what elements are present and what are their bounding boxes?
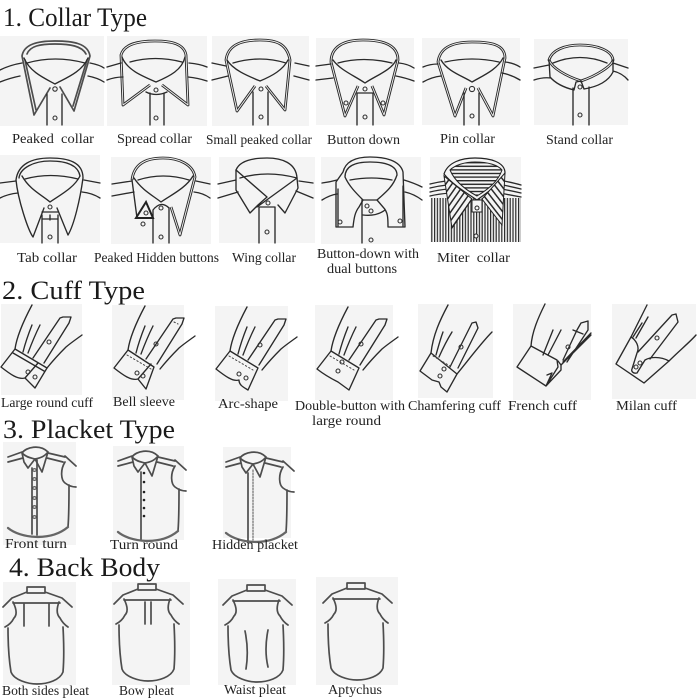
icon: chamfering cuff	[420, 305, 492, 392]
label: Button-down with dual buttons	[317, 246, 419, 276]
label: Stand collar: Stand collar	[546, 132, 614, 147]
label: Button-down with dual buttons: dual buttons	[327, 261, 397, 276]
label: Double-button with large round: large round	[312, 413, 381, 428]
icon: wing collar	[218, 158, 313, 243]
heading: 3. Placket Type: 3. Placket Type	[3, 415, 175, 444]
icon: milan cuff	[616, 305, 696, 383]
item: miter collar	[430, 157, 521, 265]
label: Bell sleeve: Bell sleeve	[113, 394, 175, 409]
heading: 1. Collar Type: 1. Collar Type	[3, 3, 147, 32]
heading: 4. Back Body: 4. Back Body	[9, 553, 160, 582]
label: Peaked Hidden buttons: Peaked Hidden buttons	[94, 250, 219, 265]
label: Miter collar: Miter collar	[437, 250, 511, 265]
item: wing collar	[218, 157, 315, 265]
item: waist pleat	[218, 579, 296, 697]
label: Arc-shape: Arc-shape	[218, 396, 278, 411]
label: Chamfering cuff: Chamfering cuff	[408, 398, 502, 413]
icon: peaked hidden buttons collar	[112, 158, 210, 243]
icon: peaked collar	[0, 41, 104, 125]
item: peaked collar	[0, 36, 104, 146]
icon: spread collar	[107, 41, 207, 125]
icon: aptychus back	[323, 583, 392, 680]
item: both sides pleat	[2, 582, 89, 698]
icon: button down collar	[316, 40, 414, 125]
label: Button down: Button down	[327, 132, 400, 147]
icon: arc-shape cuff	[216, 307, 297, 390]
icon: front turn shirt	[8, 447, 76, 537]
label: Bow pleat: Bow pleat	[119, 683, 174, 698]
icon: bell sleeve cuff	[114, 306, 195, 389]
label: Tab collar: Tab collar	[17, 250, 78, 265]
label: Small peaked collar: Small peaked collar	[206, 132, 312, 147]
item: double-button with large round cuff	[295, 305, 405, 428]
heading: 2. Cuff Type: 2. Cuff Type	[2, 276, 145, 305]
section: back body	[2, 553, 398, 698]
item: pin collar	[422, 38, 520, 146]
label: Spread collar: Spread collar	[117, 131, 193, 146]
label: Pin collar: Pin collar	[440, 131, 496, 146]
icon: hidden placket shirt	[226, 452, 294, 542]
item: aptychus	[316, 577, 398, 697]
icon: small peaked collar	[212, 40, 309, 125]
icon: french cuff	[517, 304, 591, 386]
label: French cuff: French cuff	[508, 398, 578, 413]
item: spread collar	[107, 36, 207, 146]
item: turn round placket	[110, 446, 186, 552]
label: Button-down with dual buttons: Button-down with	[317, 246, 419, 261]
item: small peaked collar	[206, 36, 312, 147]
label: Waist pleat: Waist pleat	[224, 682, 286, 697]
item: peaked hidden buttons collar	[94, 157, 219, 265]
item: french cuff	[508, 304, 591, 413]
icon: stand collar	[534, 45, 628, 125]
label: Milan cuff: Milan cuff	[616, 398, 678, 413]
label: Double-button with large round	[295, 398, 405, 428]
label: Peaked collar: Peaked collar	[12, 131, 95, 146]
item: stand collar	[534, 39, 628, 147]
label: Aptychus: Aptychus	[328, 682, 382, 697]
icon: double-button large round cuff	[317, 307, 398, 390]
label: Large round cuff: Large round cuff	[1, 395, 94, 410]
item: chamfering cuff	[408, 304, 502, 413]
item: hidden placket	[212, 447, 298, 552]
section: placket type	[3, 415, 298, 552]
label: Front turn: Front turn	[5, 536, 67, 551]
label: Turn round: Turn round	[110, 537, 178, 552]
item: tab collar	[0, 155, 100, 265]
item: button down collar	[316, 38, 414, 147]
section: cuff type	[1, 276, 696, 428]
icon: waist pleat back	[223, 585, 292, 682]
item: button-down with dual buttons collar	[317, 157, 422, 276]
icon: button-down dual buttons collar	[322, 157, 422, 243]
item: bell sleeve	[112, 305, 195, 409]
icon: large round cuff	[1, 305, 82, 388]
item: bow pleat	[112, 582, 190, 698]
label: Both sides pleat: Both sides pleat	[2, 683, 89, 698]
item: arc-shape cuff	[215, 306, 297, 411]
label: Double-button with large round: Double-button with	[295, 398, 405, 413]
section: collar type	[0, 3, 628, 276]
item: large round cuff	[1, 304, 94, 410]
label: Hidden placket: Hidden placket	[212, 537, 298, 552]
item: milan cuff	[612, 304, 696, 413]
label: Wing collar: Wing collar	[232, 250, 297, 265]
icon: miter collar	[430, 158, 521, 242]
icon: turn round shirt	[118, 451, 186, 541]
icon: bow pleat back	[114, 584, 183, 681]
icon: tab collar	[0, 158, 100, 243]
icon: pin collar	[423, 42, 520, 125]
item: front turn placket	[3, 442, 76, 551]
icon: both sides pleat back	[3, 587, 72, 684]
